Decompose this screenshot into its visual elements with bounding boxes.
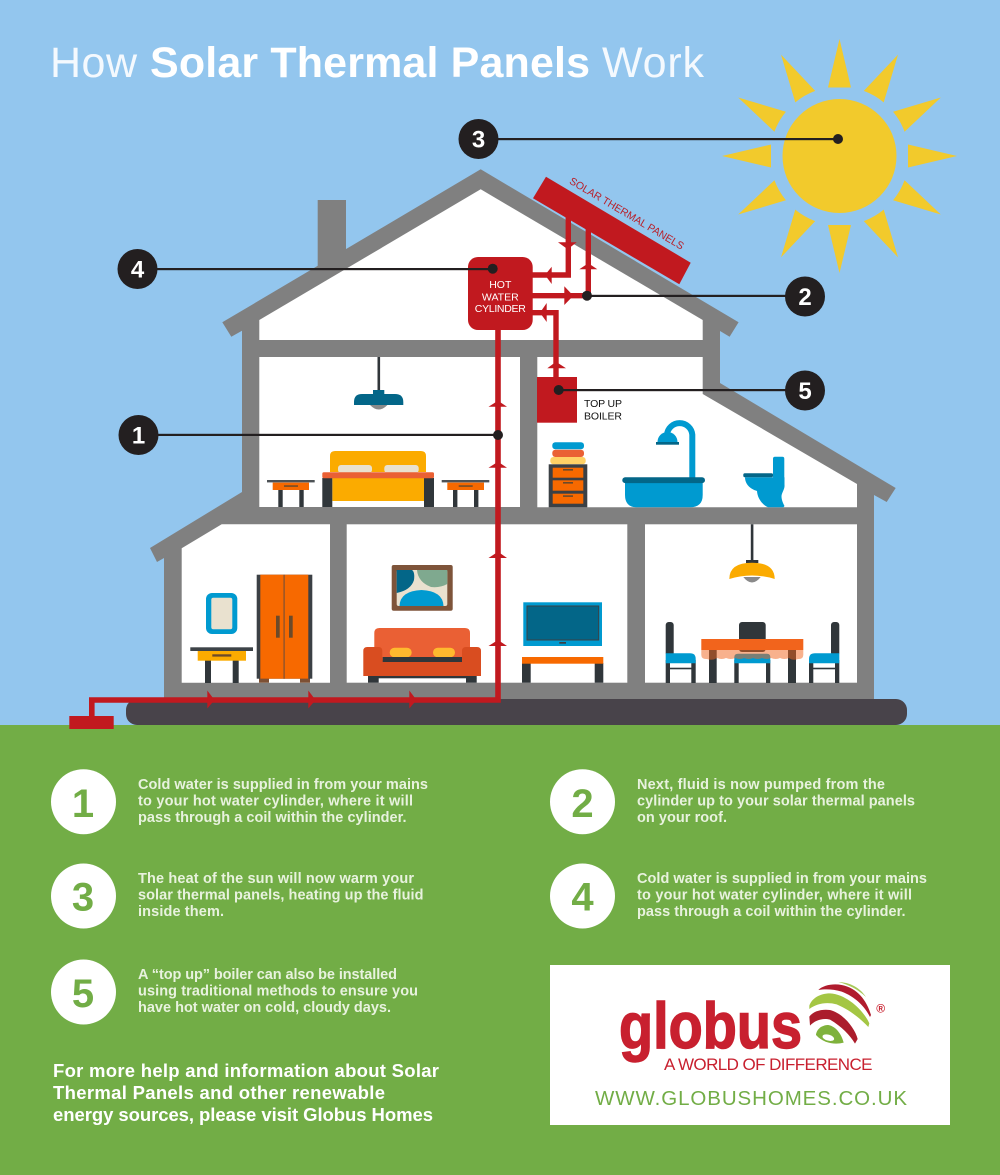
top up boiler: BOILER bbox=[584, 410, 622, 422]
callout 4: cylinder: 4 bbox=[131, 256, 145, 284]
step 2: 2 bbox=[571, 782, 594, 826]
pipe: boiler to cylinder bbox=[532, 303, 566, 378]
icon: television bbox=[523, 602, 602, 646]
icon: sun bbox=[722, 39, 957, 273]
step 4: 4 bbox=[571, 876, 594, 920]
hot water cylinder bbox=[468, 257, 533, 330]
step 3: The heat of the sun will now warm your bbox=[138, 871, 414, 887]
left chair bbox=[666, 622, 696, 683]
icon: bedroom ceiling lamp bbox=[354, 357, 403, 410]
closing call to action: For more help and information about Solar bbox=[53, 1060, 439, 1081]
icon: framed picture bbox=[392, 565, 453, 611]
callout 2: pump bbox=[582, 276, 825, 316]
step 3 bbox=[51, 864, 424, 928]
callout 3: sun bbox=[458, 119, 843, 159]
step 4 bbox=[550, 864, 927, 928]
chimney bbox=[318, 200, 346, 280]
right chair bbox=[809, 622, 839, 683]
callout 5: boiler bbox=[554, 370, 825, 410]
front chair bbox=[734, 654, 770, 683]
title: Solar Thermal Panels bbox=[150, 39, 590, 87]
table top bbox=[701, 639, 803, 650]
callout 4: cylinder bbox=[118, 249, 498, 289]
hot water cylinder: HOT bbox=[489, 279, 512, 291]
step 2: Next, fluid is now pumped from the bbox=[637, 777, 885, 793]
step 2 bbox=[550, 769, 915, 834]
hot water cylinder: WATER bbox=[482, 292, 519, 304]
step 5: A “top up” boiler can also be installed bbox=[138, 967, 397, 983]
solar thermal panel bbox=[533, 175, 691, 284]
callout 1: mains: 1 bbox=[132, 422, 145, 450]
icon: chest of drawers with towels bbox=[549, 442, 587, 507]
icon: dining ceiling lamp bbox=[729, 524, 775, 582]
title bbox=[50, 39, 704, 87]
icon: striped globe bbox=[809, 982, 871, 1044]
step 3: 3 bbox=[72, 876, 94, 920]
lower left room bbox=[182, 524, 330, 683]
icon: dining table and chairs bbox=[666, 622, 839, 683]
upper right room bbox=[537, 357, 857, 507]
panel label: SOLAR THERMAL PANELS bbox=[567, 175, 686, 253]
green ground panel bbox=[0, 725, 1000, 1175]
icon: right bedside table bbox=[442, 480, 489, 507]
step 3: solar thermal panels, heating up the fluid bbox=[138, 888, 424, 904]
pipe: panel to cylinder bbox=[532, 210, 577, 284]
lower right room bbox=[645, 524, 857, 683]
top up boiler bbox=[537, 377, 622, 423]
icon: bed bbox=[322, 451, 434, 507]
step 4: Cold water is supplied in from your mains bbox=[637, 871, 927, 887]
website address: WWW.GLOBUSHOMES.CO.UK bbox=[595, 1087, 907, 1110]
step 5: have hot water on cold, cloudy days. bbox=[138, 1000, 391, 1016]
attic room bbox=[259, 189, 703, 340]
step 5 bbox=[51, 960, 418, 1024]
step 1 bbox=[51, 769, 428, 834]
pipe: cylinder to panel bbox=[532, 225, 597, 305]
lower middle room bbox=[347, 524, 627, 683]
icon: bath with shower bbox=[622, 423, 705, 507]
logo panel bbox=[550, 965, 950, 1125]
step 1: Cold water is supplied in from your mains bbox=[138, 777, 428, 793]
step 3: inside them. bbox=[138, 904, 224, 920]
step 1: 1 bbox=[72, 782, 94, 826]
house cross-section bbox=[150, 169, 896, 699]
icon: toilet bbox=[743, 457, 785, 507]
hot water cylinder: CYLINDER bbox=[475, 303, 526, 315]
callout 2: pump: 2 bbox=[798, 284, 812, 311]
foundation slab bbox=[126, 699, 907, 725]
step 4: pass through a coil within the cylinder. bbox=[637, 904, 906, 920]
pipework and flow arrows bbox=[69, 210, 597, 729]
icon: left bedside table bbox=[267, 480, 315, 507]
title: How bbox=[50, 39, 138, 87]
title: Work bbox=[602, 39, 704, 87]
pipe: mains to cylinder bbox=[69, 330, 507, 729]
logo wordmark: globus bbox=[619, 989, 802, 1062]
step 1: to your hot water cylinder, where it will bbox=[138, 794, 413, 810]
upper left room bbox=[259, 357, 520, 507]
callout 3: sun: 3 bbox=[472, 126, 485, 154]
closing call to action: Thermal Panels and other renewable bbox=[53, 1082, 385, 1103]
closing call to action bbox=[53, 1060, 439, 1125]
step 1: pass through a coil within the cylinder. bbox=[138, 810, 406, 826]
callout 5: boiler: 5 bbox=[798, 378, 812, 405]
step 5: using traditional methods to ensure you bbox=[138, 984, 418, 1000]
back chair bbox=[739, 622, 766, 652]
icon: TV bench bbox=[522, 657, 603, 683]
house walls and roof bbox=[150, 169, 896, 699]
icon: sofa bbox=[363, 628, 481, 683]
step 2: cylinder up to your solar thermal panels bbox=[637, 794, 915, 810]
closing call to action: energy sources, please visit Globus Homes bbox=[53, 1104, 433, 1125]
callout 1: mains bbox=[118, 415, 503, 455]
icon: wardrobe bbox=[257, 575, 312, 683]
sky background bbox=[0, 0, 1000, 725]
registered mark: ® bbox=[876, 1002, 885, 1016]
table cloth bbox=[701, 650, 803, 660]
table legs bbox=[709, 650, 717, 683]
top up boiler: TOP UP bbox=[584, 398, 622, 410]
step 4: to your hot water cylinder, where it will bbox=[637, 888, 912, 904]
icon: dressing table bbox=[190, 647, 253, 683]
logo tagline: A WORLD OF DIFFERENCE bbox=[664, 1055, 872, 1074]
step 2: on your roof. bbox=[637, 810, 727, 826]
step 5: 5 bbox=[72, 972, 94, 1016]
icon: dresser mirror bbox=[206, 593, 237, 634]
